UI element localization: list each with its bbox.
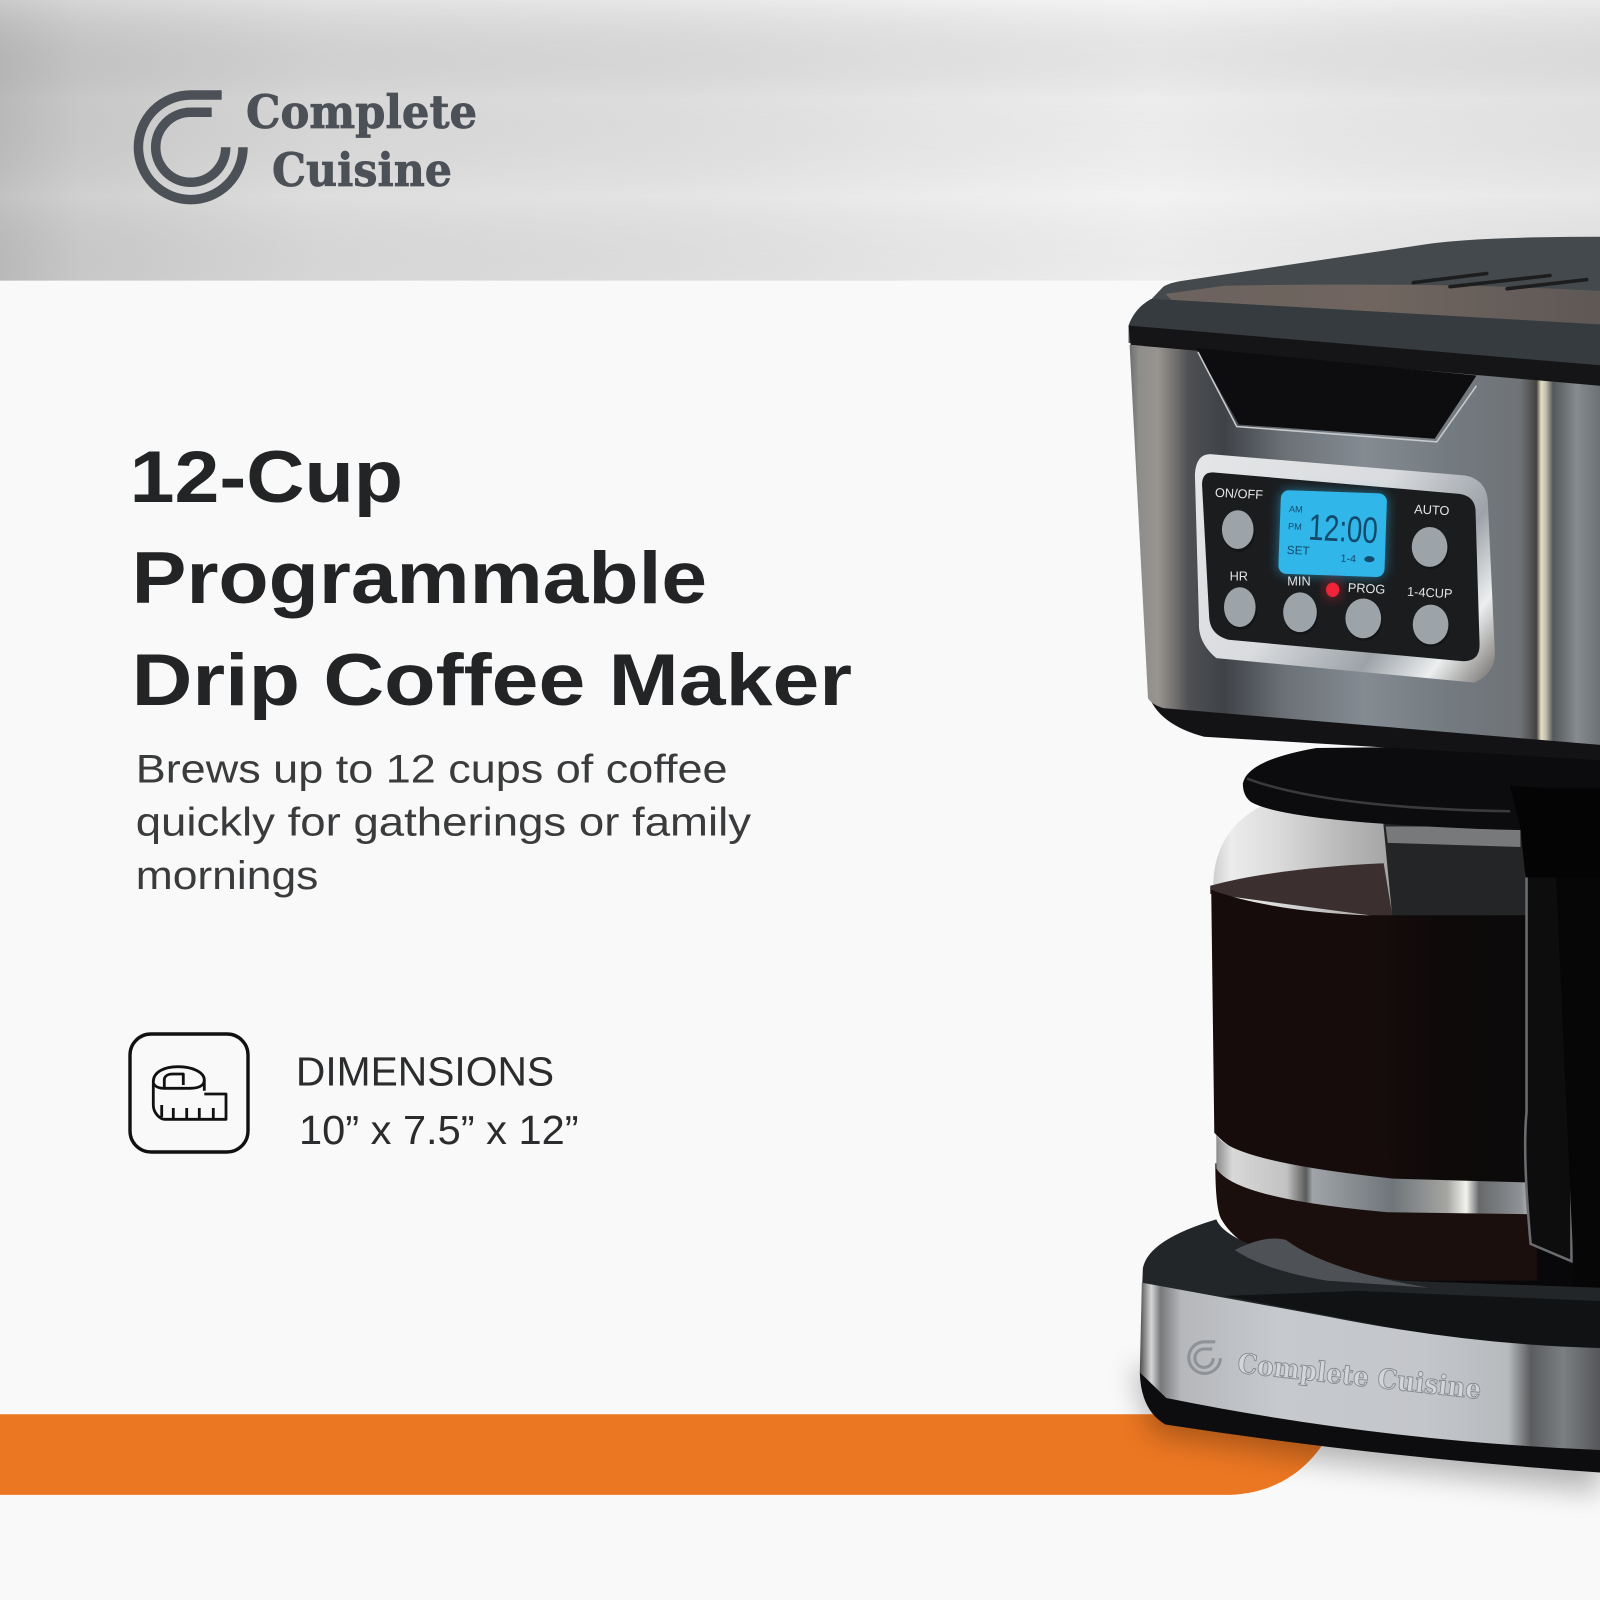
button: PROG: [1345, 580, 1386, 641]
logo: Complete Cuisine: [138, 85, 477, 200]
LCD display: AM: [1289, 504, 1303, 515]
carafe upper dark section: [1383, 816, 1531, 923]
button: PROG: PROG: [1347, 580, 1386, 597]
carafe lid gasket reflection: [1386, 827, 1520, 847]
logo wordmark: Cuisine: [272, 143, 452, 197]
coffee body: [1211, 890, 1531, 1189]
brew head block: [1510, 786, 1600, 878]
base top: [1142, 1219, 1600, 1367]
carafe glass dome: [1213, 801, 1408, 918]
heading: Programmable: [132, 536, 707, 619]
carafe chrome ring: [1216, 1135, 1537, 1214]
button: MIN: [1283, 574, 1318, 635]
machine steel body: [1130, 345, 1600, 745]
base black shadow rim: [1224, 1291, 1600, 1367]
window trim: [1198, 352, 1477, 442]
button: ON/OFF: ON/OFF: [1215, 485, 1264, 502]
base dish highlight: [1235, 1239, 1429, 1288]
orange band: [0, 1414, 1339, 1495]
button: 1-4CUP: 1-4CUP: [1407, 584, 1453, 601]
LCD display: PM: [1288, 521, 1302, 532]
dimensions text: 10” x 7.5” x 12”: [299, 1107, 579, 1153]
button: AUTO: [1412, 501, 1450, 569]
button: AUTO: AUTO: [1414, 501, 1450, 518]
embossed base logo: Complete Cuisine: [1236, 1348, 1483, 1406]
base steel band: [1140, 1283, 1600, 1450]
embossed base logo: [1189, 1342, 1483, 1406]
lid rim: [1247, 779, 1510, 811]
logo wordmark: Complete: [246, 85, 477, 139]
description text: quickly for gatherings or family: [136, 801, 751, 845]
control panel black face: [1202, 472, 1480, 661]
lid underside strip: [1129, 326, 1600, 386]
dark backing behind carafe foot: [1400, 1204, 1600, 1301]
coffee dark right side: [1367, 915, 1531, 1189]
button: MIN: MIN: [1287, 574, 1311, 589]
button: ON/OFF: [1215, 485, 1264, 552]
dimensions text: DIMENSIONS: [296, 1049, 554, 1095]
right column: [1556, 878, 1600, 1288]
button: 1-4CUP: [1407, 584, 1453, 647]
lid vents: [1413, 273, 1587, 289]
description text: Brews up to 12 cups of coffee: [136, 748, 728, 792]
lid front band: [1129, 299, 1600, 365]
lid brown reflection: [1165, 284, 1600, 324]
description text: mornings: [136, 854, 318, 898]
logo wordmark: [246, 85, 477, 197]
control panel chrome bezel: [1195, 454, 1495, 683]
logo mark: [138, 95, 243, 200]
carafe bottom section: [1215, 1163, 1537, 1281]
LCD display: 1-4: [1340, 553, 1356, 565]
base black foot: [1140, 1372, 1600, 1472]
lid top surface: [1129, 237, 1600, 386]
coffee surface: [1210, 863, 1393, 918]
dimensions text: [296, 1049, 579, 1153]
coffee maker product illustration: [1129, 237, 1600, 1492]
LCD display: [1278, 490, 1387, 577]
power indicator LED: [1323, 581, 1342, 599]
header: brushed metal band: [0, 0, 1600, 281]
carafe handle: [1525, 856, 1571, 1261]
base shadow: [1133, 1367, 1600, 1492]
heading: [130, 435, 852, 721]
heading: Drip Coffee Maker: [132, 638, 852, 721]
button: HR: HR: [1230, 569, 1248, 584]
carafe lid: [1243, 745, 1600, 832]
button: HR: [1224, 569, 1257, 630]
icon: tape measure: [130, 1034, 248, 1152]
LCD display: 12:00: [1307, 507, 1379, 551]
water window recess: [1196, 348, 1477, 439]
machine body lower lip: [1148, 694, 1600, 760]
LCD display: SET: [1286, 544, 1310, 558]
description text: [136, 748, 751, 898]
heading: 12-Cup: [130, 435, 403, 518]
